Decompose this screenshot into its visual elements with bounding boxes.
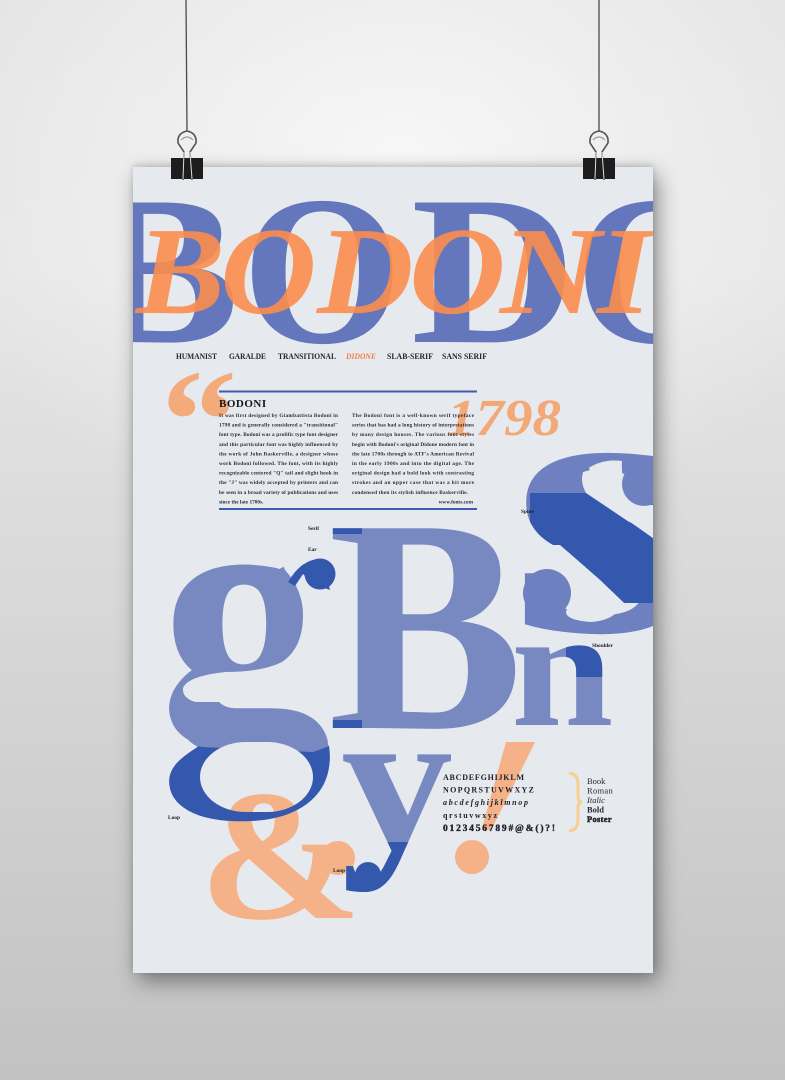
- text block: right column: series that has had a long history of interpretations: [352, 423, 474, 429]
- text block: right column: by many design houses. The various font styles: [352, 432, 474, 438]
- heading: blue BODO letters: [133, 200, 653, 344]
- letter: ampersand: &: [199, 753, 362, 959]
- letter: S ball terminals: [523, 468, 653, 608]
- letter: y loop highlight: [346, 842, 408, 892]
- text block: left column: be seen in a broad variety of publications and uses: [219, 490, 338, 496]
- text block: left column: [219, 413, 339, 505]
- letter: italic exclamation mark: [455, 742, 535, 874]
- text block: left column: font type. Bodoni was a prolific type font designer: [219, 432, 339, 438]
- annotation labels: [168, 509, 614, 874]
- font weights list: Italic: [586, 795, 605, 805]
- heading: orange italic BODONI: O: [409, 202, 506, 340]
- letter: g loop highlight: g: [161, 411, 332, 825]
- letter: g with masked counters: [169, 564, 330, 822]
- text block: left column: since the late 1700s.: [219, 499, 264, 505]
- letter: S with spine highlighted: [524, 452, 653, 634]
- annotation labels: Spine: [521, 509, 534, 515]
- navigation: type classifications: SLAB-SERIF: [387, 352, 433, 361]
- text block: right column: original design had a bold look with contrasting: [352, 471, 474, 477]
- heading: orange italic BODONI: O: [220, 202, 317, 340]
- annotation labels: Serif: [308, 526, 319, 532]
- font weights list: Book: [587, 776, 606, 786]
- icon: binder clip right: [583, 131, 615, 180]
- letter: n shoulder highlight: n: [511, 575, 613, 762]
- letter: S spine highlight: S: [511, 396, 697, 685]
- text block: left column: the work of John Baskerville, a designer whose: [219, 451, 339, 457]
- navigation: type classifications: DIDONE: [345, 352, 376, 361]
- text block: right column: begin with Bodoni's original Didone modern font in: [352, 442, 474, 448]
- specimen: alphabet: ABCDEFGHIJKLM: [443, 773, 524, 782]
- text block: left column: the "J" was widely accepted by printers and can: [219, 480, 338, 486]
- text block: right column: strokes and an upper case that was a bit more: [352, 480, 475, 486]
- text block: left column: recognizable centered "Q" tail and slight hook in: [219, 471, 338, 477]
- rule top: [219, 390, 477, 392]
- letter: g with masked counters: g: [161, 411, 332, 825]
- specimen: alphabet: NOPQRSTUVWXYZ: [443, 786, 534, 794]
- text block: left column: work Bodoni followed. The font, with its highly: [219, 461, 338, 467]
- annotation labels: Shoulder: [592, 643, 614, 649]
- annotation labels: Loop: [168, 815, 180, 821]
- icon: brace: [569, 773, 582, 831]
- navigation: type classifications: [176, 354, 487, 359]
- font weights list: Bold: [587, 804, 604, 814]
- heading: blue BODO letters: O: [242, 153, 403, 389]
- letter: B: B: [328, 457, 523, 794]
- navigation: type classifications: TRANSITIONAL: [278, 352, 336, 361]
- date: 1798: 1798: [447, 390, 561, 447]
- letter: B serif highlight: B: [328, 457, 523, 794]
- specimen: alphabet: [443, 773, 555, 834]
- heading: blue BODO letters: B: [84, 153, 239, 389]
- text block: right column: the late 1700s through to ATF's American Revival: [352, 451, 475, 457]
- specimen: alphabet: qrstuvwxyz: [443, 811, 497, 820]
- annotation labels: Loop: [333, 868, 345, 874]
- navigation: type classifications: HUMANIST: [176, 352, 217, 361]
- heading: orange italic BODONI: I: [595, 203, 658, 341]
- letter: g link between bowl and loop: [169, 670, 224, 740]
- letter: n: n: [511, 575, 613, 762]
- hanging wire right: [598, 0, 600, 131]
- heading: orange italic BODONI: B: [134, 202, 225, 340]
- poster sheet: [133, 167, 653, 973]
- specimen: alphabet: abcdefghijklmnop: [443, 798, 528, 807]
- specimen: alphabet: 0123456789#@&()?!: [443, 823, 555, 834]
- letter: S spine highlight: [530, 493, 653, 603]
- text block: left column: It was first designed by Giambattista Bodoni in: [219, 413, 338, 419]
- heading: BODONI: BODONI: [219, 398, 267, 410]
- letter: italic exclamation mark: !: [432, 695, 557, 917]
- text block: right column: The Bodoni font is a well-known serif typeface: [352, 413, 475, 419]
- icon: opening quotation mark: “: [161, 341, 237, 501]
- text block: right column: in the early 1900s and into the digital age. The: [352, 461, 475, 467]
- font weights list: [586, 778, 613, 822]
- text block: right column: [352, 413, 475, 505]
- text block: left column: and this particular font was highly influenced by: [219, 442, 338, 448]
- text block: right column: condensed then its stylish influence Baskerville.: [352, 490, 469, 496]
- icon: binder clip left: [171, 131, 203, 180]
- font weights list: Poster: [587, 814, 612, 824]
- letter: S with spine highlighted: S: [511, 396, 697, 685]
- heading: orange italic BODONI: D: [316, 202, 414, 340]
- rule bottom: [219, 508, 477, 510]
- text block: right column: www.fonts.com: [439, 499, 474, 505]
- letter: y: y: [341, 667, 453, 893]
- heading: blue BODO letters: O: [575, 152, 739, 388]
- navigation: type classifications: GARALDE: [229, 352, 266, 361]
- letter: g ear: [288, 558, 336, 590]
- hanging wire left: [186, 0, 187, 131]
- font weights list: Roman: [587, 786, 614, 796]
- text block: left column: 1798 and is generally considered a "transitional": [219, 423, 338, 429]
- navigation: type classifications: SANS SERIF: [442, 352, 487, 361]
- letter: y loop highlight: y: [341, 667, 453, 893]
- heading: orange italic BODONI: [134, 230, 653, 314]
- letter: ampersand: [210, 794, 355, 920]
- annotation labels: Ear: [308, 547, 317, 553]
- heading: orange italic BODONI: N: [498, 202, 605, 340]
- heading: blue BODO letters: D: [411, 152, 576, 388]
